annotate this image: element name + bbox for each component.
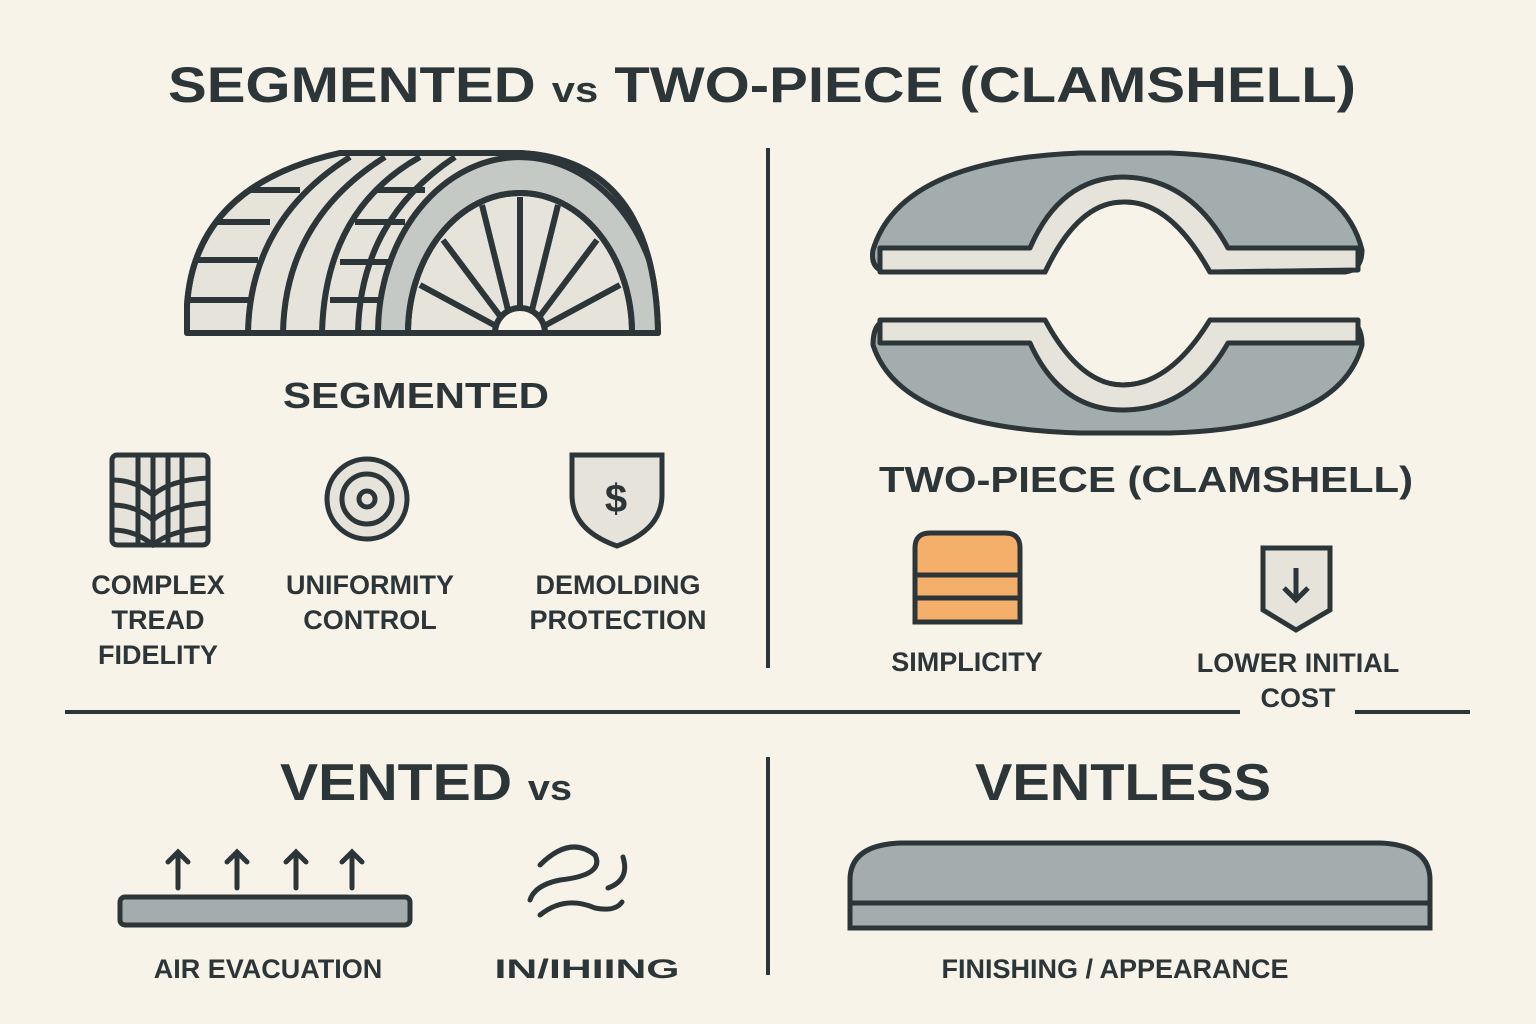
icon: tread (112, 455, 208, 545)
label: lower initial cost: COST (1260, 683, 1336, 713)
label: simplicity: SIMPLICITY (891, 647, 1043, 677)
label: uniformity control: UNIFORMITY (286, 570, 454, 600)
label: demolding protection: PROTECTION (529, 605, 707, 635)
heading: two-piece: TWO-PIECE (CLAMSHELL) (879, 459, 1413, 500)
heading: vented vs: VENTED vs (280, 754, 572, 812)
title: SEGMENTED vs TWO-PIECE (CLAMSHELL) (168, 57, 1356, 113)
label: complex tread fidelity: TREAD (112, 605, 204, 635)
icon: ventless slab (850, 843, 1430, 928)
icon: clamshell mold (872, 153, 1362, 433)
label: complex tread fidelity: FIDELITY (98, 640, 218, 670)
label: lower initial cost: LOWER INITIAL (1197, 648, 1399, 678)
icon: wavy (530, 847, 625, 915)
icon: simplicity (915, 533, 1020, 622)
label: uniformity control: CONTROL (303, 605, 437, 635)
icon: target (327, 459, 407, 539)
label: demolding protection: DEMOLDING (536, 570, 700, 600)
icon: vent arrows (120, 852, 410, 925)
label: complex tread fidelity: COMPLEX (91, 570, 225, 600)
icon: shield dollar (572, 455, 662, 546)
icon: lower cost (1263, 548, 1330, 630)
heading: segmented: SEGMENTED (283, 375, 549, 416)
icon: segmented tire (180, 153, 662, 333)
label: air evacuation: AIR EVACUATION (154, 954, 382, 984)
heading: ventless: VENTLESS (975, 754, 1271, 812)
label: finishing: FINISHING / APPEARANCE (941, 954, 1289, 984)
label: inhibiting: IN/IHIING (494, 954, 680, 984)
icon: shield dollar: $ (605, 477, 627, 521)
